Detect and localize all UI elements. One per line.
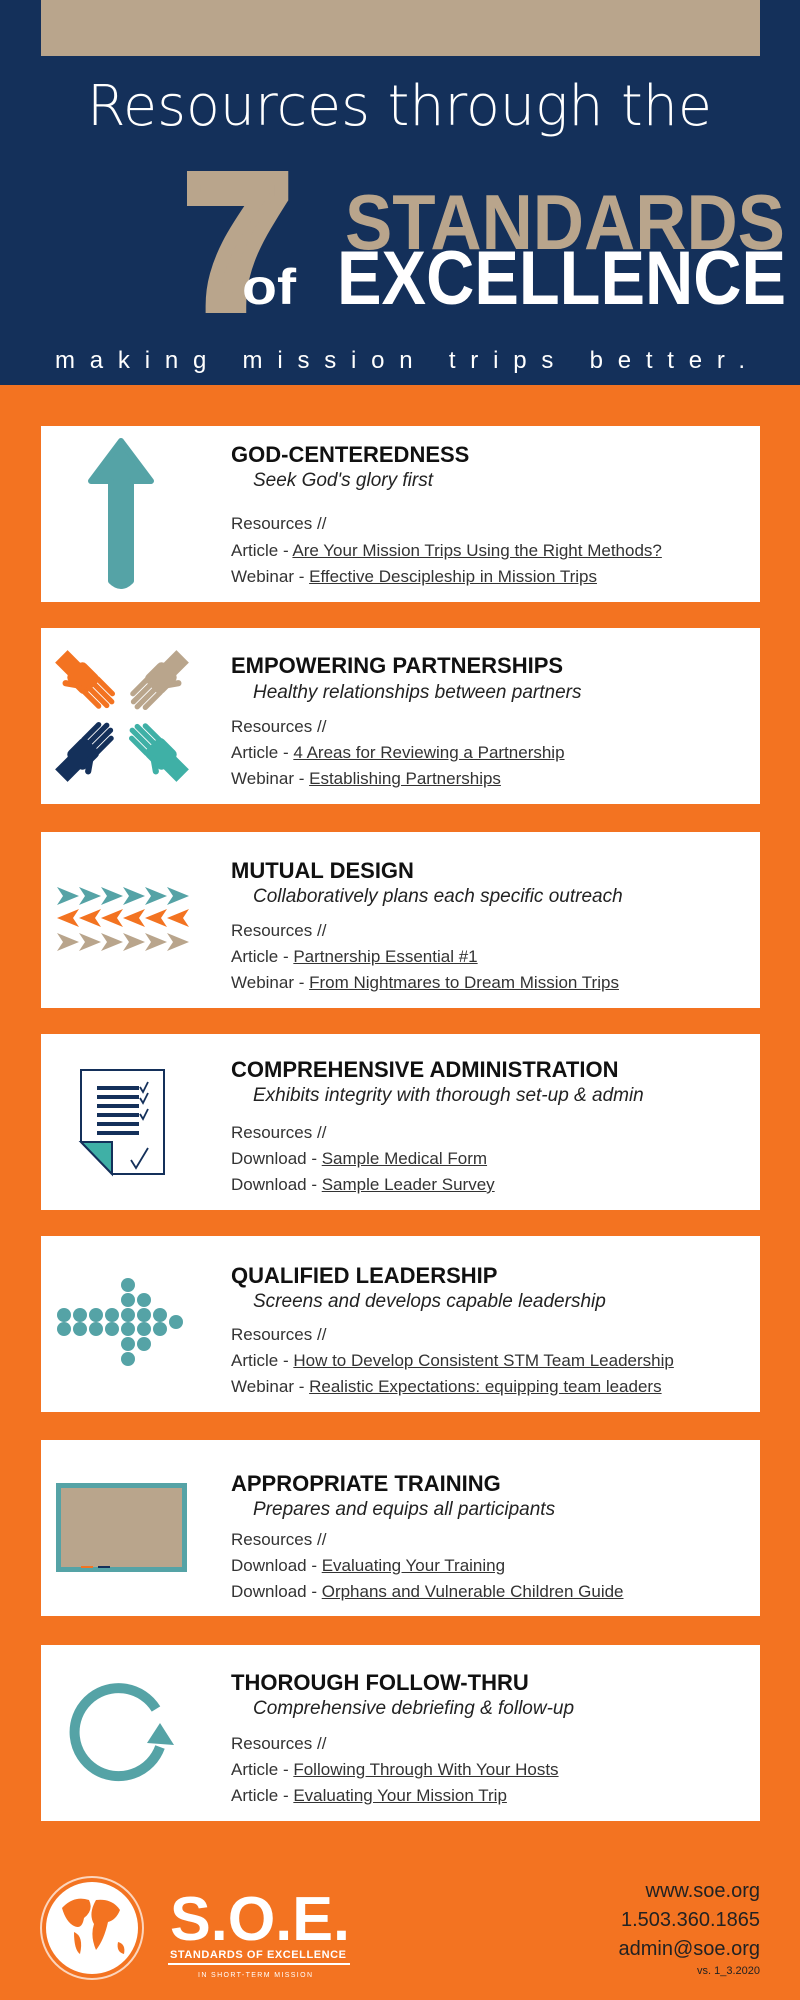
- panel: Empowering partnerships: EMPOWERING PARTNERSHIPS: [231, 653, 563, 678]
- panel: God-centeredness: Resources //: [231, 514, 326, 533]
- icon: globe: [41, 1877, 143, 1979]
- panel: Mutual design: Article - Partnership Essential #1: [231, 947, 478, 966]
- panel: God-centeredness: GOD-CENTEREDNESS: [231, 442, 469, 467]
- panel: Thorough follow-thru: Comprehensive debriefing & follow-up: [253, 1698, 574, 1719]
- panel: Appropriate training: Download - Orphans and Vulnerable Children Guide: [231, 1582, 624, 1601]
- logo: SOE: IN SHORT-TERM MISSION: [198, 1972, 312, 1979]
- panel: Comprehensive administration: Resources //: [231, 1123, 326, 1142]
- panel: Comprehensive administration: COMPREHENSIVE ADMINISTRATION: [231, 1057, 618, 1082]
- panel: Appropriate training: Resources //: [231, 1530, 326, 1549]
- contact info: 1.503.360.1865: [621, 1909, 760, 1931]
- contact info: vs. 1_3.2020: [697, 1965, 760, 1977]
- panel: Thorough follow-thru: Article - Following Through With Your Hosts: [231, 1760, 559, 1779]
- panel: Comprehensive administration: Download - Sample Medical Form: [231, 1149, 487, 1168]
- title: Resources through the: Resources through the: [87, 74, 712, 139]
- panel: Appropriate training: Prepares and equips all participants: [253, 1499, 555, 1520]
- tagline: making mission trips better.: [55, 347, 745, 374]
- panel: God-centeredness: Seek God's glory first: [253, 470, 433, 491]
- contact info: [619, 1880, 760, 1977]
- panel: Empowering partnerships: Webinar - Establishing Partnerships: [231, 769, 501, 788]
- icon: up arrow: [88, 438, 154, 589]
- icon: dotted arrow: [57, 1278, 183, 1366]
- icon: circular arrow: [70, 1683, 174, 1782]
- panel: Thorough follow-thru: [41, 1645, 760, 1821]
- tan banner bar: [41, 0, 760, 56]
- panel: Appropriate training: [41, 1440, 760, 1616]
- panel: Mutual design: Collaboratively plans each specific outreach: [253, 886, 623, 907]
- panel: Empowering partnerships: Article - 4 Areas for Reviewing a Partnership: [231, 743, 565, 762]
- panel: God-centeredness: Webinar - Effective Descipleship in Mission Trips: [231, 567, 597, 586]
- panel: Comprehensive administration: Exhibits integrity with thorough set-up & admin: [253, 1085, 644, 1106]
- panel: Empowering partnerships: Healthy relationships between partners: [253, 682, 581, 703]
- panel: Appropriate training: Download - Evaluating Your Training: [231, 1556, 505, 1575]
- panel: Thorough follow-thru: THOROUGH FOLLOW-THRU: [231, 1670, 529, 1695]
- panel: Qualified leadership: Screens and develops capable leadership: [253, 1291, 606, 1312]
- panel: Qualified leadership: Resources //: [231, 1325, 326, 1344]
- logo: SOE: S.O.E.: [170, 1885, 350, 1954]
- contact info: admin@soe.org: [619, 1938, 760, 1960]
- header: [0, 0, 800, 385]
- panel: God-centeredness: [41, 426, 760, 602]
- panel: Appropriate training: APPROPRIATE TRAINING: [231, 1471, 501, 1496]
- logo: SOE: STANDARDS OF EXCELLENCE: [170, 1949, 346, 1961]
- panel: Mutual design: MUTUAL DESIGN: [231, 858, 414, 883]
- icon: chevron rows: [57, 887, 189, 951]
- big 7: 7: [186, 139, 289, 346]
- panel: Comprehensive administration: [41, 1034, 760, 1210]
- contact info: www.soe.org: [646, 1880, 760, 1902]
- panel: Comprehensive administration: Download - Sample Leader Survey: [231, 1175, 495, 1194]
- logo: SOE: [40, 1876, 350, 1980]
- panel: God-centeredness: Article - Are Your Mission Trips Using the Right Methods?: [231, 541, 662, 560]
- panel: Thorough follow-thru: Article - Evaluating Your Mission Trip: [231, 1786, 507, 1805]
- panel: Empowering partnerships: Resources //: [231, 717, 326, 736]
- icon: checklist document: [78, 1069, 165, 1176]
- icon: chalkboard: [56, 1483, 187, 1572]
- panel: Qualified leadership: Article - How to Develop Consistent STM Team Leadership: [231, 1351, 674, 1370]
- panel: Mutual design: Webinar - From Nightmares to Dream Mission Trips: [231, 973, 619, 992]
- panel: Mutual design: Resources //: [231, 921, 326, 940]
- panel: Qualified leadership: [41, 1236, 760, 1412]
- panel: Qualified leadership: QUALIFIED LEADERSHIP: [231, 1263, 497, 1288]
- word: of: of: [242, 259, 296, 315]
- panel: Empowering partnerships: [41, 628, 760, 804]
- icon: four hands: [55, 650, 189, 782]
- panel: Mutual design: [41, 832, 760, 1008]
- panel: Qualified leadership: Webinar - Realistic Expectations: equipping team leaders: [231, 1377, 662, 1396]
- panel: Thorough follow-thru: Resources //: [231, 1734, 326, 1753]
